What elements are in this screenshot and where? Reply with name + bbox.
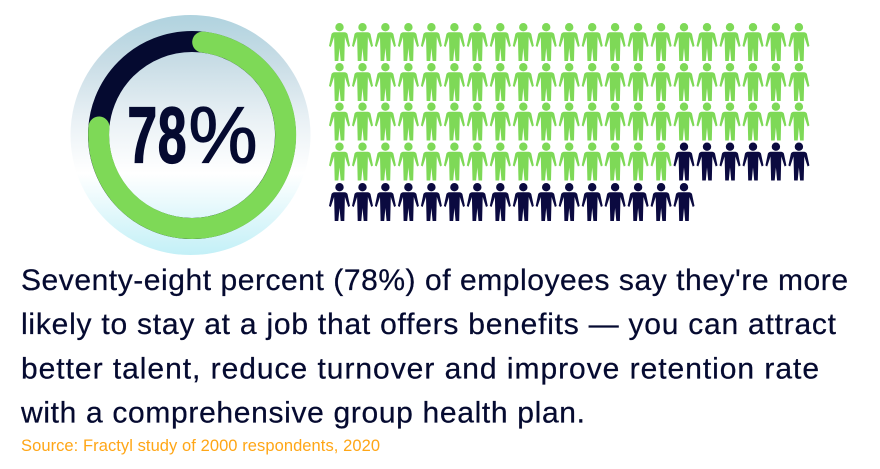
- body text: likely to stay at a job that offers benefits — you can attract: [21, 308, 837, 341]
- people row 4: green: [329, 142, 672, 180]
- percentage value: 8: [158, 90, 187, 180]
- donut chart: 78%: [70, 15, 310, 255]
- people row 3: [329, 102, 809, 140]
- pictogram: 78 of 100 people: [329, 23, 809, 221]
- people row 1: [329, 23, 809, 61]
- gradient background circle: [70, 15, 310, 255]
- percentage value: [127, 90, 258, 180]
- people row 2: [329, 63, 809, 101]
- people row 5: navy: [329, 183, 694, 221]
- percentage value: %: [188, 90, 258, 180]
- source note: Source: Fractyl study of 2000 respondents, 2020: [21, 437, 380, 455]
- body text: with a comprehensive group health plan.: [20, 397, 585, 430]
- people row 4: navy: [674, 142, 809, 180]
- green progress arc: [99, 42, 286, 229]
- body text: Seventy-eight percent (78%) of employees say they're more: [21, 264, 848, 297]
- body text: better talent, reduce turnover and improve retention rate: [21, 352, 819, 386]
- body text: [20, 264, 848, 430]
- navy ring track: [98, 42, 286, 228]
- percentage value: 7: [127, 90, 157, 180]
